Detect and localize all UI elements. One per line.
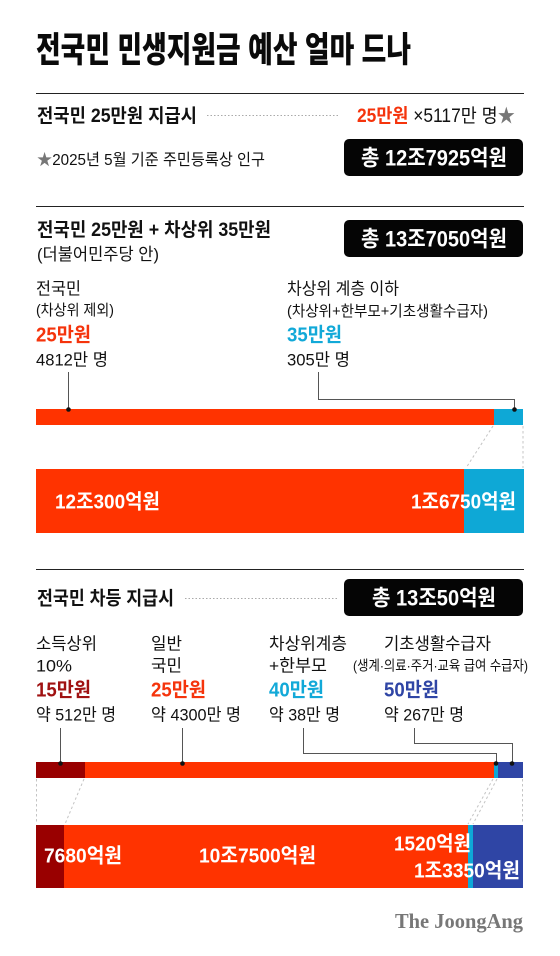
group label: general public: 25만원	[151, 678, 206, 702]
group label: general public	[151, 634, 241, 724]
heading: 전국민 25만원 + 차상위 35만원	[37, 219, 271, 241]
panel: differential payment	[36, 579, 528, 888]
total badge: 총 12조7925억원	[361, 146, 507, 170]
leader lines	[60, 728, 512, 763]
group label: near-poverty and below: (차상위+한부모+기초생활수급자)	[287, 303, 488, 320]
footnote: ★2025년 5월 기준 주민등록상 인구	[37, 151, 265, 169]
group label: near-poverty and single parents: 40만원	[269, 678, 324, 702]
large budget bar	[36, 825, 523, 888]
leader lines	[68, 372, 514, 409]
group label: top 10%	[36, 634, 116, 724]
group label: top 10%: 10%	[36, 656, 72, 676]
group label: near-poverty and single parents: +한부모	[269, 656, 327, 676]
large budget bar: 1조3350억원	[414, 860, 520, 882]
small population bar	[36, 407, 523, 425]
total badge: 총 13조50억원	[372, 586, 496, 610]
group label: top 10%: 15만원	[36, 678, 91, 702]
group label: top 10%: 소득상위	[36, 634, 97, 654]
small population bar	[36, 761, 523, 778]
group label: all citizens: (차상위 제외)	[36, 302, 114, 319]
total badge	[344, 139, 523, 176]
total badge	[344, 579, 523, 616]
group label: general public: 약 4300만 명	[151, 706, 241, 724]
total badge: 총 13조7050억원	[361, 226, 507, 252]
group label: near-poverty and below	[287, 280, 488, 370]
group label: near-poverty and single parents	[269, 634, 347, 724]
title: 전국민 민생지원금 예산 얼마 드나	[36, 31, 411, 70]
group label: near-poverty and single parents: 차상위계층	[269, 634, 347, 654]
group label: general public: 국민	[151, 656, 182, 676]
group label: all citizens: 25만원	[36, 324, 91, 346]
logo: The JoongAng: The JoongAng	[395, 909, 523, 933]
group label: near-poverty and below: 305만 명	[287, 350, 350, 370]
heading: 전국민 25만원 지급시	[37, 105, 197, 127]
group label: basic livelihood recipients	[353, 634, 528, 724]
formula: 25만원 ×5117만 명★	[357, 105, 515, 127]
group label: top 10%: 약 512만 명	[36, 706, 116, 724]
group label: all citizens	[36, 280, 114, 370]
group label: all citizens: 4812만 명	[36, 350, 108, 370]
group label: near-poverty and below: 차상위 계층 이하	[287, 280, 399, 298]
heading: 전국민 차등 지급시	[37, 588, 174, 610]
panel: Democratic Party plan	[36, 219, 524, 533]
total badge	[344, 220, 523, 257]
group label: basic livelihood recipients: 기초생활수급자	[384, 634, 491, 654]
subheading: (더불어민주당 안)	[37, 245, 159, 264]
panel: universal 250,000 won	[37, 105, 523, 176]
large budget bar	[36, 469, 524, 533]
group label: basic livelihood recipients: 50만원	[384, 678, 439, 702]
group label: basic livelihood recipients: (생계·의료·주거·교육 급여 수급자)	[353, 658, 528, 674]
group label: near-poverty and below: 35만원	[287, 324, 342, 346]
group label: near-poverty and single parents: 약 38만 명	[269, 706, 340, 724]
group label: general public: 일반	[151, 634, 182, 654]
large budget bar: 1520억원	[394, 832, 471, 856]
group label: basic livelihood recipients: 약 267만 명	[384, 706, 464, 724]
large budget bar: 1조6750억원	[411, 490, 516, 514]
large budget bar: 12조300억원	[55, 490, 160, 514]
large budget bar: 7680억원	[44, 844, 122, 868]
large budget bar: 10조7500억원	[199, 844, 316, 868]
group label: all citizens: 전국민	[36, 280, 81, 298]
